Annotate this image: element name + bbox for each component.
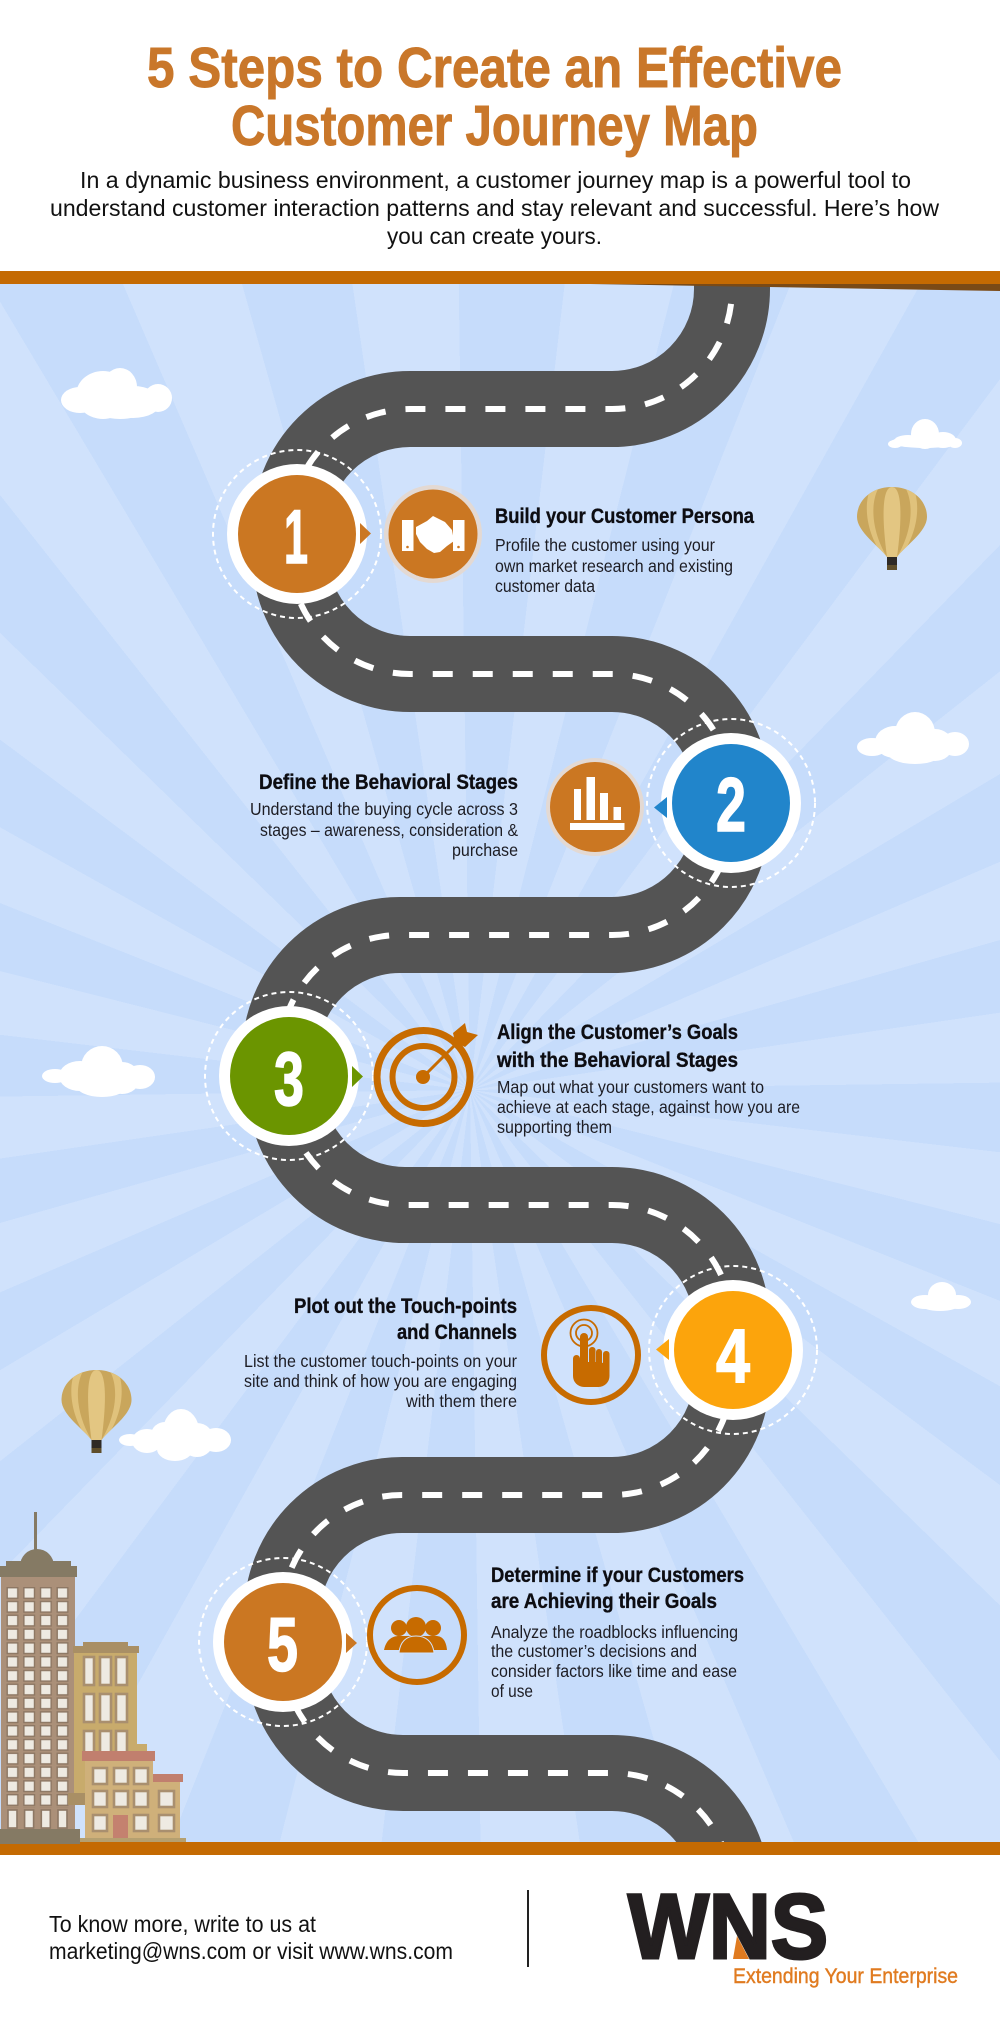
step 2 text <box>250 771 518 860</box>
title: Customer Journey Map <box>231 94 758 158</box>
cloud 2 <box>888 419 962 449</box>
intro paragraph <box>50 167 940 249</box>
buildings <box>0 1512 186 1844</box>
step 5 text: Analyze the roadblocks influencing <box>491 1622 738 1642</box>
step 1 text: own market research and existing <box>495 556 733 576</box>
title <box>147 36 842 158</box>
middle building <box>68 1642 147 1805</box>
step 3 <box>205 992 800 1160</box>
icon: touch hand <box>544 1308 638 1402</box>
balloon left <box>60 1369 132 1453</box>
step 2 <box>250 719 815 887</box>
step 3 text: with the Behavioral Stages <box>496 1049 738 1072</box>
step 1 text <box>495 505 754 596</box>
step 2 text: Define the Behavioral Stages <box>259 771 518 794</box>
step 1 text: Profile the customer using your <box>495 535 715 555</box>
cloud 5 <box>911 1282 971 1311</box>
step 5 text <box>491 1564 744 1701</box>
step 4 text: site and think of how you are engaging <box>244 1371 517 1391</box>
step 3 text: achieve at each stage, against how you are <box>497 1097 800 1117</box>
step 4 text: Plot out the Touch-points <box>294 1295 517 1318</box>
cloud 1 <box>61 368 172 419</box>
step 4 <box>244 1266 817 1434</box>
step 3 text: Map out what your customers want to <box>497 1077 764 1097</box>
step 5 marker <box>199 1558 367 1726</box>
step 1 marker: 1 <box>284 495 308 580</box>
step 1 text: Build your Customer Persona <box>495 505 754 528</box>
step 2 marker <box>647 719 815 887</box>
sky background with sun rays <box>0 284 1000 1842</box>
step 1 text: customer data <box>495 576 595 596</box>
cloud 6 <box>119 1409 231 1461</box>
step 5 text: are Achieving their Goals <box>491 1590 717 1613</box>
icon: handshake <box>384 485 482 583</box>
tall tower <box>0 1512 80 1844</box>
icon: bar chart <box>546 758 644 856</box>
step 5 text: Determine if your Customers <box>491 1564 744 1587</box>
step 4 text: and Channels <box>397 1321 517 1344</box>
step 4 text <box>244 1295 517 1411</box>
step 1 marker <box>213 450 381 618</box>
WNS logo: Extending Your Enterprise <box>733 1965 958 1988</box>
step 4 marker <box>649 1266 817 1434</box>
step 4 marker: 4 <box>716 1314 750 1399</box>
step 5 text: of use <box>491 1681 533 1701</box>
step 4 text: with them there <box>405 1391 517 1411</box>
cloud 3 <box>857 712 969 764</box>
step 5 text: the customer’s decisions and <box>491 1641 697 1661</box>
icon: target <box>377 1023 478 1124</box>
step 2 text: Understand the buying cycle across 3 <box>250 799 518 819</box>
intro paragraph: In a dynamic business environment, a customer journey map is a powerful tool to <box>80 167 911 193</box>
step 3 marker <box>205 992 373 1160</box>
cloud 4 <box>42 1046 155 1097</box>
footer contact text <box>49 1911 453 1964</box>
footer contact text: marketing@wns.com or visit www.wns.com <box>49 1938 453 1964</box>
WNS logo: WNS <box>628 1876 828 1978</box>
step 2 marker: 2 <box>716 763 746 848</box>
WNS logo <box>628 1876 958 1988</box>
step 3 text: supporting them <box>497 1117 612 1137</box>
title: 5 Steps to Create an Effective <box>147 36 842 100</box>
intro paragraph: understand customer interaction patterns and stay relevant and successful. Here’s how <box>50 195 940 221</box>
footer contact text: To know more, write to us at <box>49 1911 316 1937</box>
step 3 text <box>496 1021 800 1137</box>
intro paragraph: you can create yours. <box>387 223 602 249</box>
balloon right <box>856 486 928 570</box>
step 5 marker: 5 <box>267 1603 298 1688</box>
step 3 marker: 3 <box>274 1037 304 1122</box>
step 2 text: purchase <box>452 840 518 860</box>
top orange bar <box>0 271 1000 291</box>
low building <box>80 1751 186 1842</box>
step 2 text: stages – awareness, consideration & <box>260 820 518 840</box>
road <box>280 270 732 1893</box>
bottom orange bar <box>0 1842 1000 1855</box>
step 1 <box>213 450 754 618</box>
step 3 text: Align the Customer’s Goals <box>497 1021 738 1044</box>
step 5 <box>199 1558 744 1726</box>
step 5 text: consider factors like time and ease <box>491 1661 737 1681</box>
icon: people <box>370 1588 464 1682</box>
step 4 text: List the customer touch-points on your <box>244 1351 517 1371</box>
